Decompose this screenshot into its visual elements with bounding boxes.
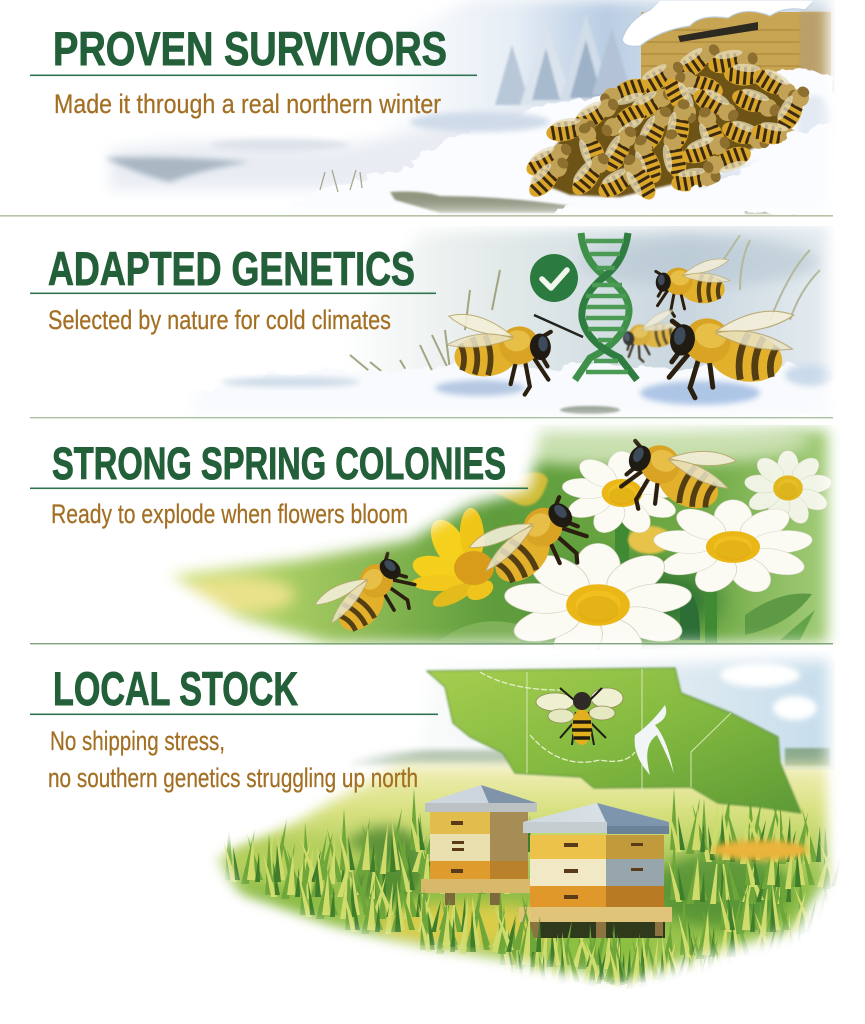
bee: top — [619, 438, 738, 511]
snow on hive roof — [622, 0, 815, 46]
title 4: LOCAL STOCK — [53, 662, 298, 715]
hive: right — [519, 803, 672, 938]
bee, upper right — [654, 258, 731, 318]
distant tree line — [350, 750, 510, 764]
stems and leaves — [440, 520, 815, 644]
text: subtitle 4: no southern genetics struggling up north — [48, 763, 418, 793]
distant snowy hills — [108, 106, 544, 192]
foreground grass — [418, 888, 731, 989]
panel: proven survivors illustration — [105, 0, 835, 215]
map — [427, 668, 801, 813]
daisy: top — [562, 451, 676, 533]
bee, faint centre — [622, 309, 676, 364]
panel: strong spring colonies illustration — [168, 424, 838, 650]
hive: left — [421, 785, 537, 905]
rule 1 — [30, 74, 477, 76]
title 3: STRONG SPRING COLONIES — [52, 438, 506, 489]
text: subtitle 4: No shipping stress, — [50, 726, 225, 756]
rule 3 — [30, 488, 528, 489]
bee cluster — [526, 44, 810, 200]
bee: left — [314, 552, 417, 632]
snow drift — [323, 68, 834, 190]
dark stalk — [534, 315, 583, 337]
meadow background — [150, 425, 840, 645]
reeds — [350, 235, 820, 382]
icon: dna helix — [575, 233, 637, 380]
grass blades — [223, 788, 865, 984]
yellow flower — [412, 508, 494, 607]
text: subtitle 4 — [48, 726, 418, 793]
exposed ground — [390, 192, 572, 213]
distant valley shadow — [105, 157, 250, 182]
rule 2 — [30, 292, 436, 294]
orange wildflowers — [712, 840, 808, 860]
text: subtitle 2: Selected by nature for cold climates — [48, 305, 391, 335]
panel: local stock illustration — [190, 650, 865, 985]
title 2: ADAPTED GENETICS — [48, 242, 415, 295]
faint yellow flower behind — [490, 472, 548, 506]
divider — [0, 215, 833, 217]
dead grass — [320, 170, 362, 192]
bee, left large — [446, 314, 553, 397]
text: subtitle 1: Made it through a real northern winter — [54, 89, 441, 119]
winter sky — [424, 0, 659, 112]
divider — [30, 417, 833, 418]
icon: green check badge — [530, 254, 578, 302]
daisy: far right — [743, 451, 833, 526]
frosty background — [385, 226, 832, 373]
divider — [30, 643, 833, 644]
snow ground — [367, 361, 800, 383]
meadow colour patches — [230, 827, 790, 963]
daisy: bottom large — [504, 543, 692, 650]
rule 4 — [30, 714, 438, 715]
icon: bee on map — [536, 688, 623, 745]
daisy: right — [651, 500, 815, 595]
bee: middle — [468, 495, 589, 584]
snowy fir trees — [495, 14, 632, 105]
bee, right large — [666, 310, 795, 400]
wooden hive — [641, 12, 831, 88]
text: subtitle 3: Ready to explode when flowers bloom — [51, 499, 408, 529]
snow in front of cluster — [550, 120, 835, 214]
sky and clouds — [457, 654, 835, 770]
panel: adapted genetics illustration — [180, 226, 835, 418]
title 1: PROVEN SURVIVORS — [53, 22, 447, 75]
meadow — [190, 765, 835, 985]
